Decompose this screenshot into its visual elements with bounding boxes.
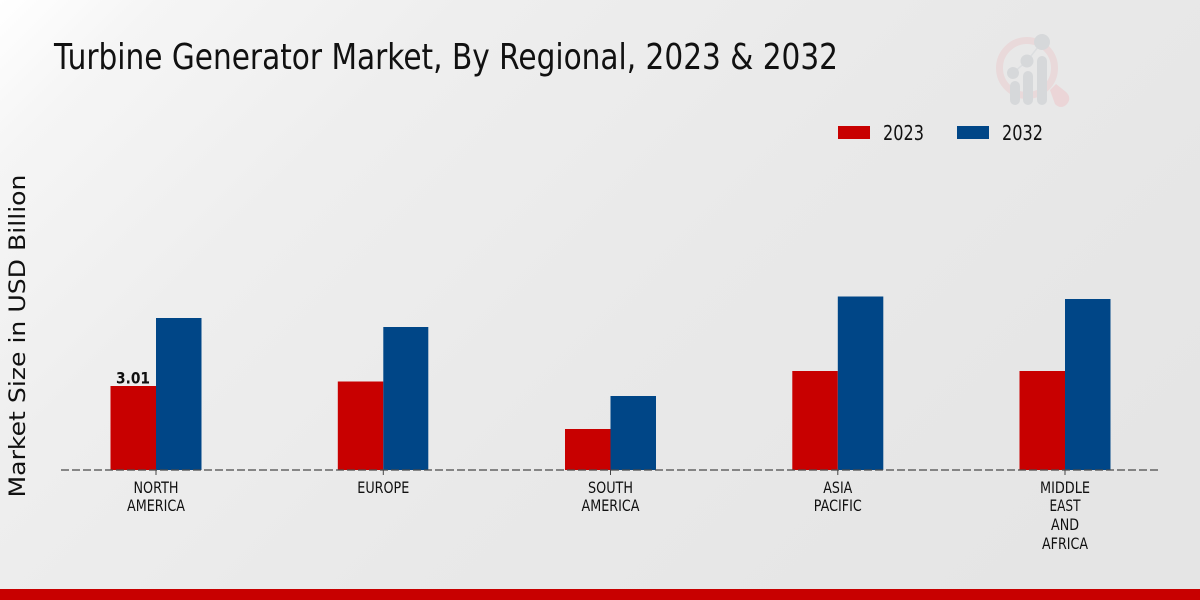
- label: Middle East and Africa: MIDDLE: [1040, 478, 1090, 497]
- label: North America: [127, 478, 185, 515]
- label: North America: AMERICA: [127, 496, 185, 515]
- legend item: 2032: [957, 121, 1043, 145]
- label: Asia Pacific: PACIFIC: [814, 496, 862, 515]
- title: Turbine Generator Market, By Regional, 2023 & 2032: [53, 37, 838, 78]
- label: Asia Pacific: [814, 478, 862, 515]
- bars: Middle East and Africa: [1020, 299, 1110, 470]
- legend item: 2032: 2032: [1002, 121, 1043, 145]
- y-axis label: Market Size in USD Billion: [5, 174, 31, 498]
- label: Middle East and Africa: AND: [1051, 515, 1079, 534]
- label: Middle East and Africa: EAST: [1050, 496, 1081, 515]
- label: South America: [582, 478, 640, 515]
- bars: Europe: [338, 327, 428, 470]
- label: North America: NORTH: [134, 478, 178, 497]
- label: Middle East and Africa: [1040, 478, 1090, 553]
- category labels: [127, 478, 1090, 553]
- bar chart: [61, 296, 1159, 553]
- legend: [838, 121, 1043, 145]
- bars: North America: [110, 318, 202, 470]
- label: Europe: EUROPE: [357, 478, 409, 497]
- legend item: 2023: 2023: [883, 121, 924, 145]
- label: South America: AMERICA: [582, 496, 640, 515]
- label: Asia Pacific: ASIA: [823, 478, 852, 497]
- data label: 3.01: 3.01: [116, 368, 150, 388]
- bars: South America: [565, 396, 656, 470]
- footer bar: [0, 589, 1200, 600]
- legend item: 2023: [838, 121, 924, 145]
- bars: Asia Pacific: [792, 296, 883, 470]
- label: South America: SOUTH: [588, 478, 633, 497]
- label: Middle East and Africa: AFRICA: [1042, 534, 1088, 553]
- watermark logo: [1000, 34, 1069, 107]
- baseline: [61, 469, 1159, 471]
